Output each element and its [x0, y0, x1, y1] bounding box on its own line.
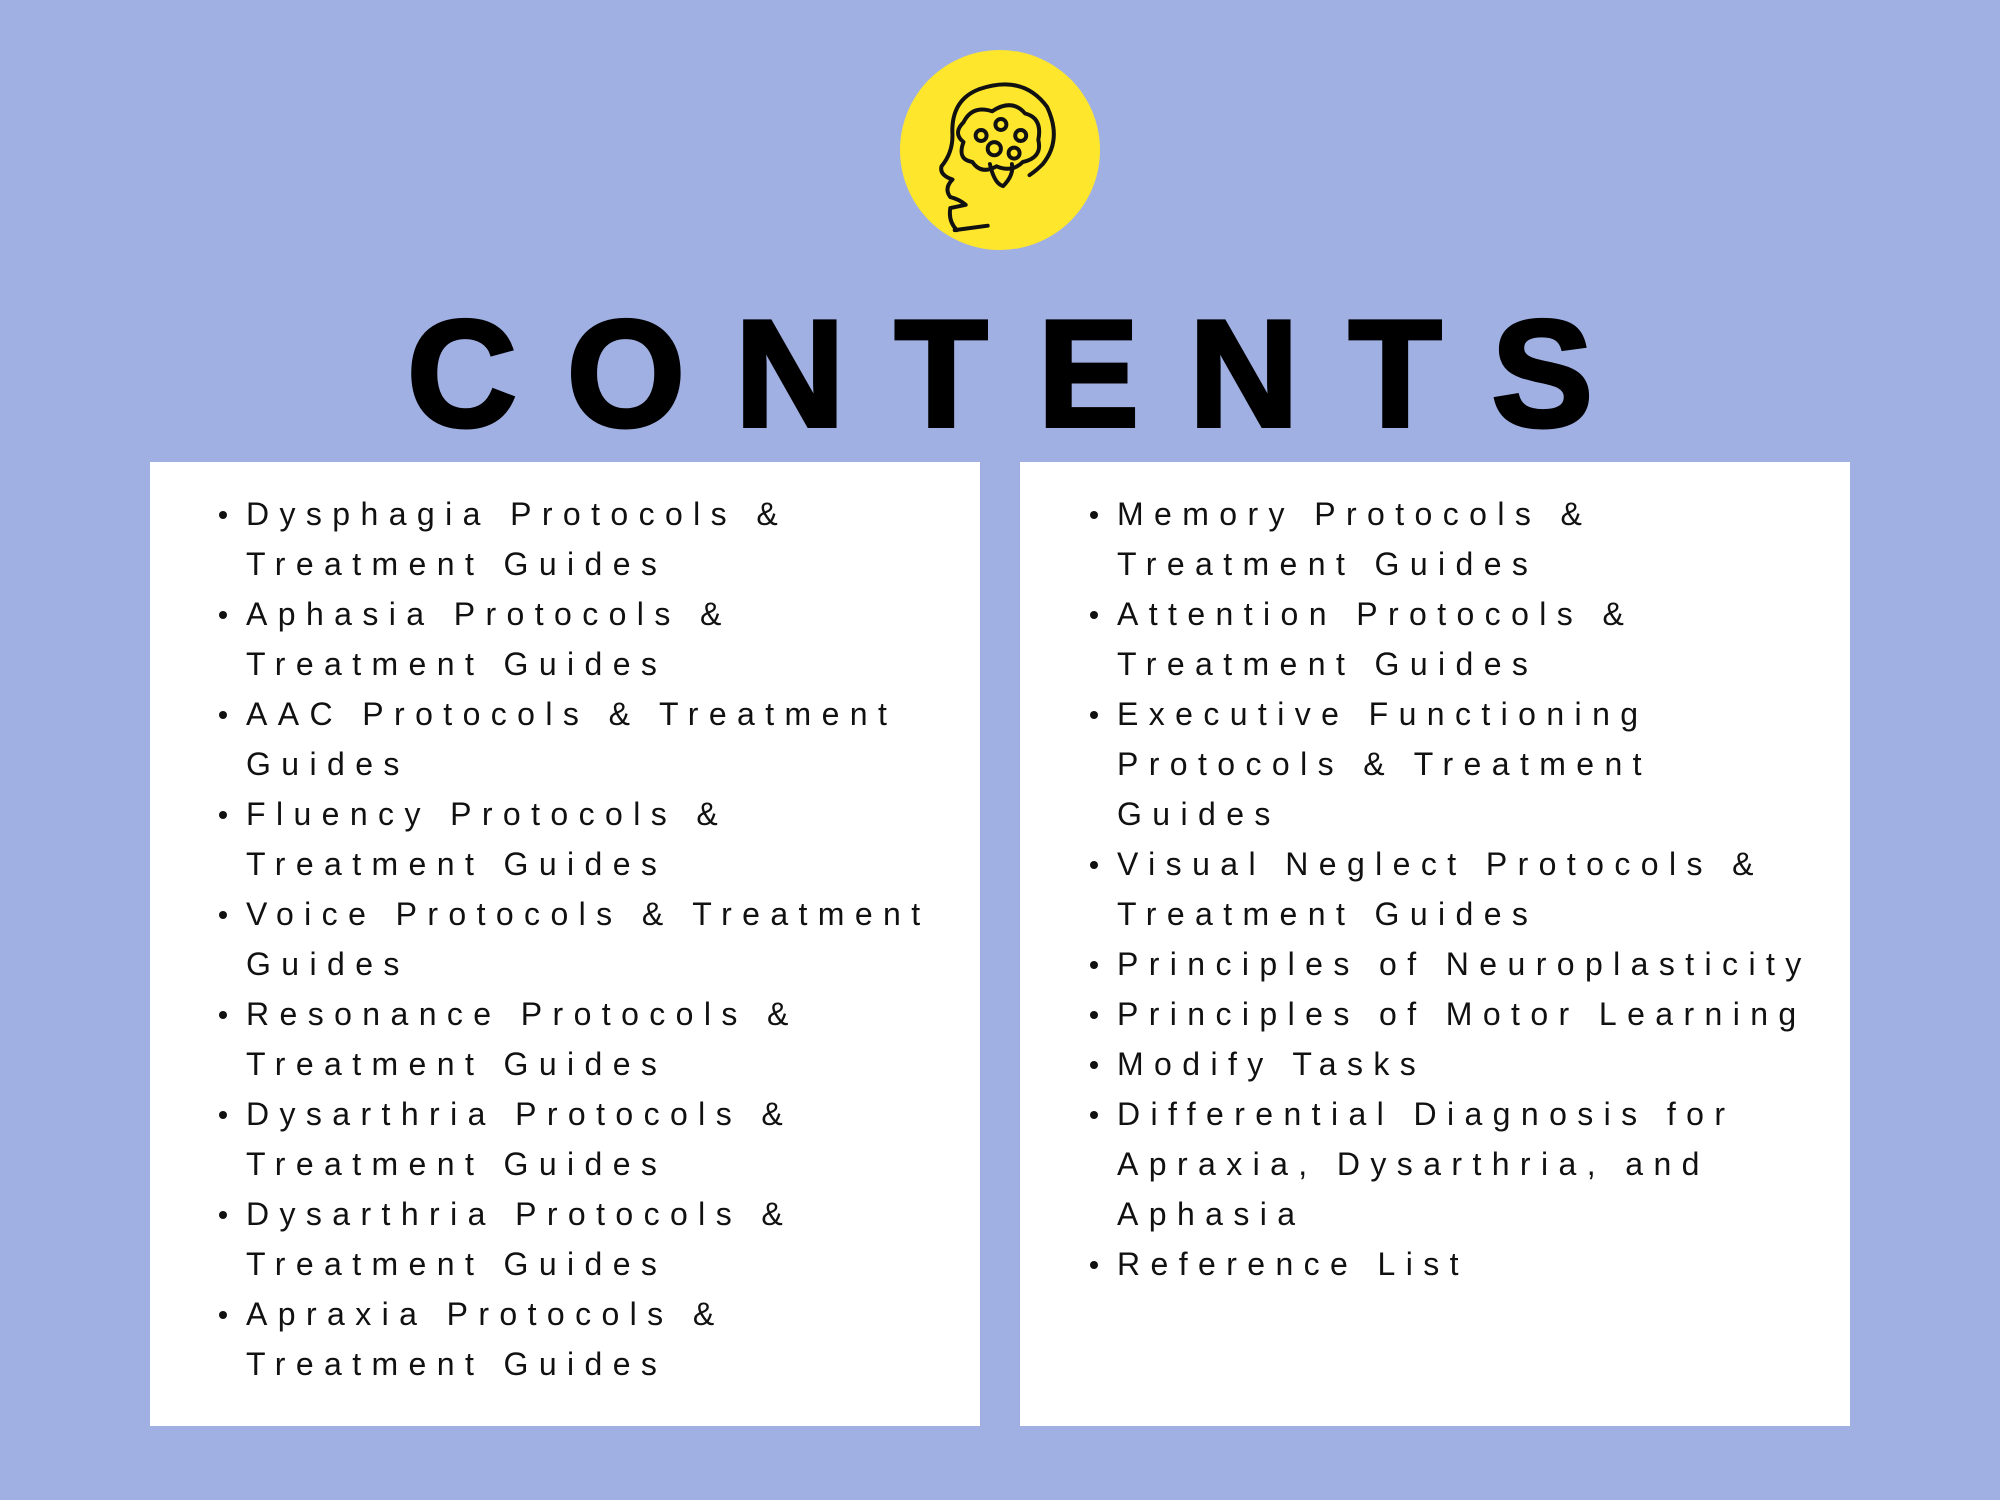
- panel: right list: Attention Protocols &: [1117, 596, 1634, 632]
- panel: left list: Guides: [246, 946, 410, 982]
- panel: right list: Treatment Guides: [1117, 546, 1538, 582]
- panel: left list: Dysphagia Protocols &: [246, 496, 788, 532]
- panel: left list: Dysarthria Protocols &: [246, 1196, 793, 1232]
- panel: left list: [150, 462, 980, 1426]
- panel: left list: Dysarthria Protocols &: [246, 1096, 793, 1132]
- panel: right list: Reference List: [1117, 1246, 1469, 1282]
- panel: left list: Guides: [246, 746, 410, 782]
- panel: right list: Differential Diagnosis for: [1117, 1096, 1735, 1132]
- panel: left list: Treatment Guides: [246, 1046, 667, 1082]
- panel: right list: Treatment Guides: [1117, 646, 1538, 682]
- panel: left list: Aphasia Protocols &: [246, 596, 732, 632]
- panel: left list: Fluency Protocols &: [246, 796, 728, 832]
- panel: left list: Treatment Guides: [246, 1346, 667, 1382]
- title: CONTENTS: [407, 289, 1643, 459]
- panel: left list: Apraxia Protocols &: [246, 1296, 725, 1332]
- panel: left list: Resonance Protocols &: [246, 996, 799, 1032]
- panel: right list: Principles of Motor Learning: [1117, 996, 1807, 1032]
- panel: right list: Memory Protocols &: [1117, 496, 1592, 532]
- panel: left list: Treatment Guides: [246, 646, 667, 682]
- panel: right list: Aphasia: [1117, 1196, 1305, 1232]
- icon: brain in yellow circle: [900, 50, 1100, 250]
- panel: right list: Executive Functioning: [1117, 696, 1648, 732]
- panel: right list: Modify Tasks: [1117, 1046, 1426, 1082]
- panel: right list: Protocols & Treatment: [1117, 746, 1652, 782]
- panel: right list: Guides: [1117, 796, 1281, 832]
- panel: left list: Treatment Guides: [246, 1146, 667, 1182]
- panel: left list: Treatment Guides: [246, 546, 667, 582]
- panel: right list: Visual Neglect Protocols &: [1117, 846, 1764, 882]
- panel: left list: Treatment Guides: [246, 1246, 667, 1282]
- panel: left list: Treatment Guides: [246, 846, 667, 882]
- panel: right list: [1020, 462, 1850, 1426]
- panel: right list: Principles of Neuroplasticity: [1117, 946, 1812, 982]
- panel: left list: Voice Protocols & Treatment: [246, 896, 931, 932]
- panel: right list: Apraxia, Dysarthria, and: [1117, 1146, 1710, 1182]
- panel: left list: AAC Protocols & Treatment: [246, 696, 897, 732]
- panel: right list: Treatment Guides: [1117, 896, 1538, 932]
